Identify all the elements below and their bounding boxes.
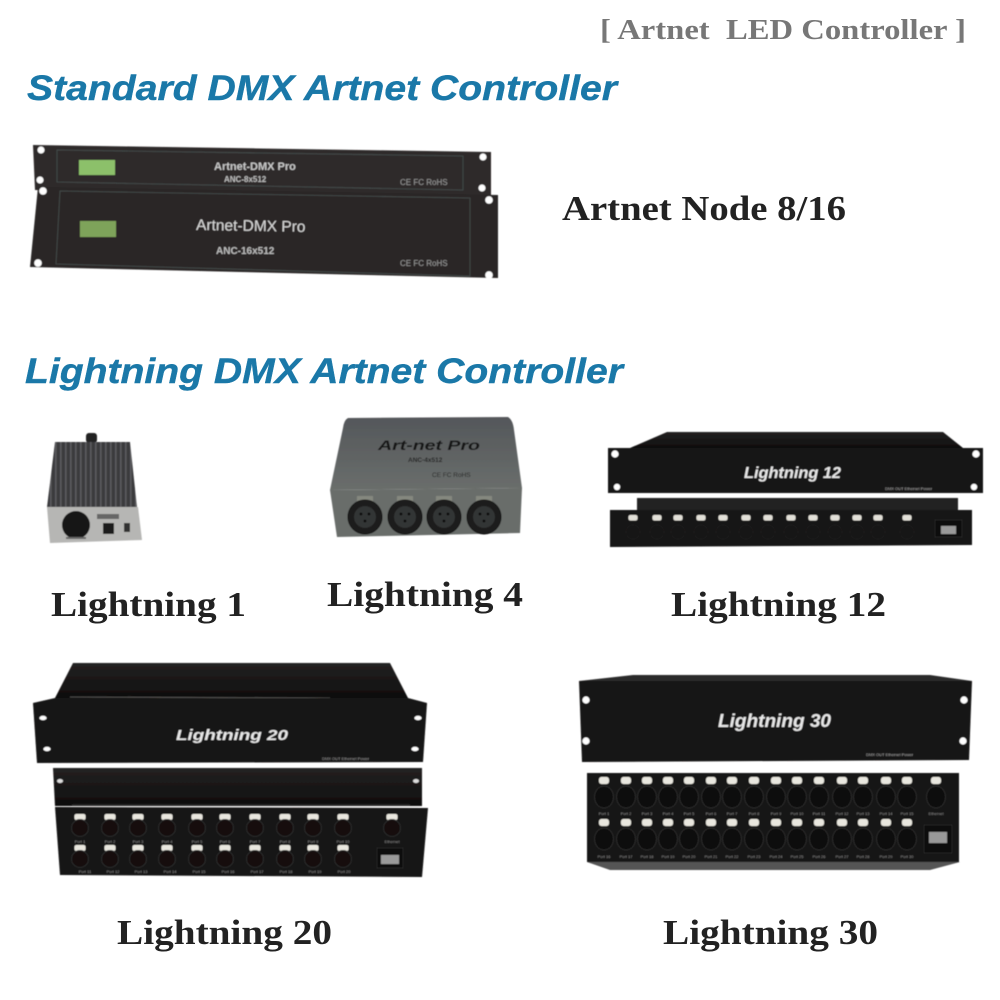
product image: Artnet Node 8 and 16 [30,145,498,279]
rear unit: Port 29 [880,854,893,859]
front unit: Lightning 30 [718,711,831,731]
rear unit: Port 26 [813,854,826,859]
front unit [579,675,972,762]
panel: Artnet Node 16: CE FC RoHS [400,259,448,268]
product image: Lightning 4 [330,417,522,537]
rear unit: Port 21 [705,854,718,859]
rear unit: Port 1 [75,839,86,844]
rear unit: Port 14 [164,869,177,874]
rear unit: Port 6 [706,811,717,816]
rear unit: Port 5 [684,811,695,816]
rear unit: Port 22 [726,854,739,859]
label: Lightning 12: Lightning 12 [671,585,886,624]
front unit [608,432,983,493]
rear unit: Port 24 [770,854,783,859]
product image: Lightning 4: CE FC RoHS [432,472,471,479]
rear unit: Port 8 [280,839,291,844]
rear unit: Port 7 [727,811,738,816]
rear unit: Port 10 [337,839,350,844]
rear unit: Port 17 [620,854,633,859]
title: [ Artnet LED Controller ] [600,14,966,46]
rear unit: Port 11 [813,811,826,816]
rear unit [53,768,428,877]
product image: Lightning 4: ANC-4x512 [408,457,443,464]
front unit: Lightning 20 [176,727,289,744]
rear unit: Port 15 [901,811,914,816]
rear unit: Port 18 [641,854,654,859]
panel: Artnet Node 8 [33,145,491,200]
rear unit: Port 16 [598,854,611,859]
rear unit: Port 9 [308,839,319,844]
product image: Lightning 1 [47,433,142,543]
rear unit: Port 11 [79,869,92,874]
rear unit: Port 30 [901,854,914,859]
heading: lightning controllers: Lightning DMX Artnet Controller [25,352,626,391]
product image: Lightning 4: Art-net Pro [377,437,481,453]
rear unit: Port 19 [309,869,322,874]
front unit: DMX OUT Ethernet Power [866,752,914,757]
rear unit: Port 16 [222,869,235,874]
rear unit: Port 5 [192,839,203,844]
product image: Lightning 20 [33,663,428,877]
label: Lightning 20: Lightning 20 [117,913,332,952]
label: Lightning 4: Lightning 4 [327,575,523,614]
label: Lightning 30: Lightning 30 [663,913,878,952]
rear unit: Port 2 [105,839,116,844]
rear unit: Port 17 [251,869,264,874]
label: Lightning 1: Lightning 1 [51,585,246,624]
label: Artnet Node 8/16: Artnet Node 8/16 [562,189,846,228]
front unit: DMX OUT Ethernet Power [885,486,933,491]
rear unit: Port 12 [107,869,120,874]
front unit: Lightning 12 [744,465,841,482]
rear unit: Port 3 [642,811,653,816]
panel: Artnet Node 8: Artnet-DMX Pro [214,161,296,173]
rear unit: Port 12 [836,811,849,816]
product image: Lightning 30 [579,675,972,870]
rear unit: Ethernet [928,811,944,816]
rear unit: Port 13 [135,869,148,874]
rear unit: Port 20 [683,854,696,859]
panel: Artnet Node 8: ANC-8x512 [224,175,267,184]
rear unit: Ethernet [384,839,400,844]
rear unit: Port 15 [193,869,206,874]
front unit: DMX OUT Ethernet Power [322,756,370,761]
rear unit: Port 7 [250,839,261,844]
rear unit: Port 4 [162,839,173,844]
rear unit [610,498,972,547]
rear unit: Port 6 [220,839,231,844]
rear unit: Port 20 [338,869,351,874]
rear unit: Port 1 [599,811,610,816]
rear unit: Port 27 [836,854,849,859]
rear unit: Port 14 [880,811,893,816]
panel: Artnet Node 16: Artnet-DMX Pro [196,217,306,236]
panel: Artnet Node 16 [30,187,498,279]
rear unit: Port 9 [771,811,782,816]
rear unit: Port 2 [621,811,632,816]
rear unit: Port 13 [857,811,870,816]
rear unit: Port 3 [133,839,144,844]
panel: Artnet Node 16: ANC-16x512 [216,246,275,257]
heading: standard controllers: Standard DMX Artnet Controller [27,69,620,108]
rear unit: Port 28 [857,854,870,859]
rear unit: Port 19 [662,854,675,859]
rear unit: Port 4 [663,811,674,816]
front unit [33,663,427,763]
rear unit: Port 25 [791,854,804,859]
rear unit: Port 8 [749,811,760,816]
panel: Artnet Node 8: CE FC RoHS [400,178,448,187]
rear unit: Port 18 [280,869,293,874]
rear unit: Port 23 [748,854,761,859]
rear unit: Port 10 [791,811,804,816]
rear unit [587,773,960,870]
product image: Lightning 12 [608,432,983,547]
